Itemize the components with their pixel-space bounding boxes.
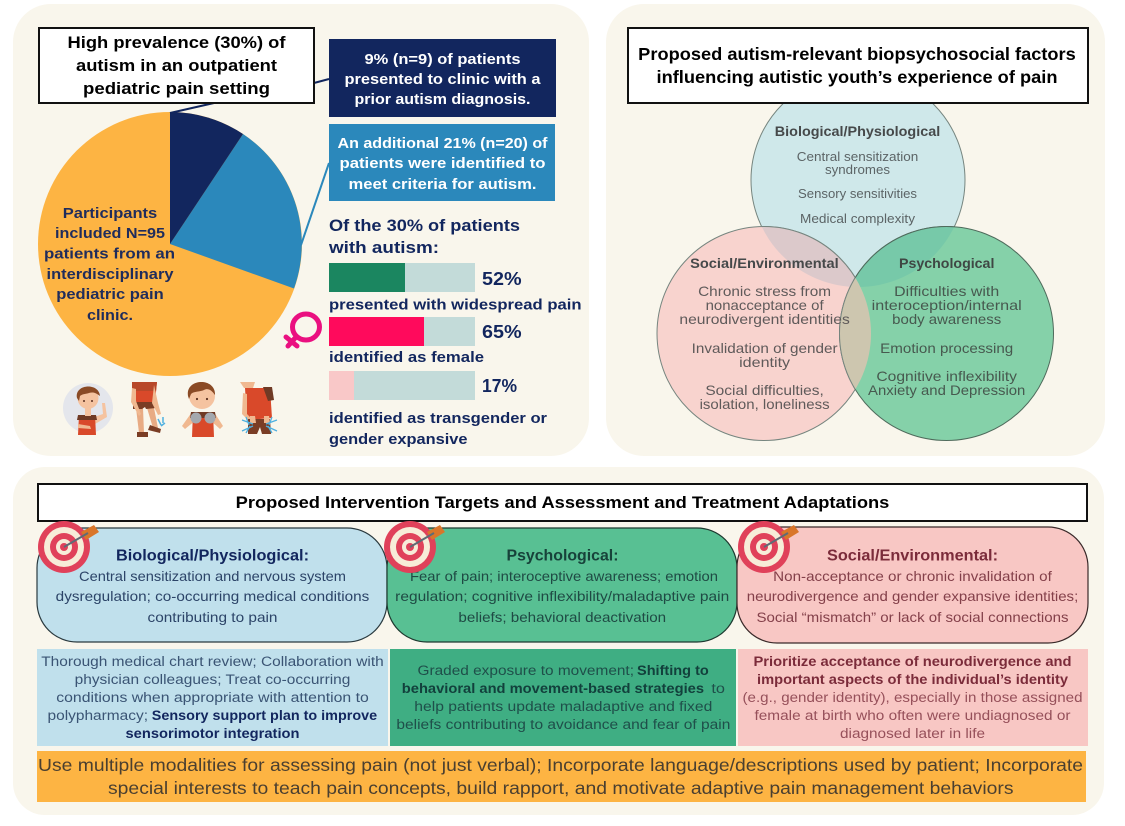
venn text: biological — [775, 123, 940, 226]
bar: transgender 17%: identified as transgender or — [329, 410, 547, 427]
icon: child with leg pain — [131, 382, 165, 437]
bar: transgender 17%: gender expansive — [329, 431, 468, 448]
adaptations: psychological — [390, 649, 736, 746]
pie chart — [38, 112, 302, 376]
adaptations: biological: conditions when appropriate with attention to — [56, 690, 369, 705]
target card: social: Social/Environmental: — [827, 548, 998, 565]
adaptations: social: important aspects of the individual’s identity — [757, 672, 1069, 687]
pie label — [44, 205, 175, 324]
callout: prior diagnosis: presented to clinic with a — [344, 71, 541, 88]
heading: high prevalence: pediatric pain setting — [83, 80, 270, 98]
heading: high prevalence — [39, 28, 314, 103]
heading: biopsychosocial factors — [628, 28, 1088, 103]
icon: target social — [738, 521, 799, 573]
venn text: biological: Central sensitization — [797, 150, 918, 164]
adaptations: social: Prioritize acceptance of neurodivergence and — [754, 654, 1072, 669]
heading: intervention targets — [38, 484, 1087, 521]
pie label: clinic. — [87, 307, 133, 324]
adaptations: social: diagnosed later in life — [840, 726, 985, 741]
adaptations: psychological: Graded exposure to movement; — [418, 663, 634, 678]
target card: psychological: regulation; cognitive inflexibility/maladaptive pain — [395, 588, 729, 604]
heading: biopsychosocial factors: influencing autistic youth’s experience of pain — [656, 67, 1058, 87]
venn text: psychological: Psychological — [899, 255, 994, 271]
venn text: social: isolation, loneliness — [700, 396, 830, 412]
bar: widespread pain 52%: presented with widespread pain — [329, 296, 582, 314]
venn text: social — [679, 255, 850, 412]
venn text: psychological: Cognitive inflexibility — [876, 368, 1017, 384]
venn text: social: Invalidation of gender — [692, 340, 838, 356]
target card: biological: Biological/Physiological: — [116, 548, 309, 565]
venn text: biological: Biological/Physiological — [775, 123, 940, 139]
bar: widespread pain 52% — [329, 263, 582, 314]
icon: child with shoulder pain — [182, 382, 223, 437]
banner: assessment modalities: special interests to teach pain concepts, build rapport, and motivate adaptive pain management behaviors — [108, 778, 1014, 798]
pie label: patients from an — [44, 246, 175, 262]
adaptations: biological: Thorough medical chart review; Collaboration with — [41, 654, 384, 669]
venn text: psychological: interoception/internal — [872, 297, 1022, 313]
callout: additional patients: An additional 21% (n=20) of — [338, 135, 549, 152]
venn text: psychological — [868, 255, 1025, 398]
venn text: psychological: body awareness — [892, 311, 1001, 327]
adaptations: biological — [37, 649, 388, 746]
venn text: biological: Sensory sensitivities — [798, 187, 917, 201]
subheading: of the 30 percent — [328, 217, 520, 257]
target card: social: Social “mismatch” or lack of social connections — [756, 609, 1068, 625]
target card: psychological: beliefs; behavioral deactivation — [458, 609, 666, 625]
adaptations: social: (e.g., gender identity), especially in those assigned — [742, 690, 1082, 705]
adaptations: psychological: to — [711, 681, 725, 696]
banner: assessment modalities: Use multiple modalities for assessing pain (not just verbal); Incorporate language/descriptions used by patient; Incorporate — [38, 755, 1083, 775]
venn text: social: nonacceptance of — [706, 297, 824, 313]
pie label: included N=95 — [55, 225, 165, 242]
callout: additional patients: meet criteria for autism. — [348, 176, 536, 193]
venn text: social: neurodivergent identities — [679, 311, 850, 327]
adaptations: psychological: Shifting to — [637, 663, 709, 678]
adaptations: psychological: behavioral and movement-based strategies — [402, 681, 704, 696]
bar: transgender 17%: 17% — [482, 375, 517, 396]
bar: widespread pain 52%: 52% — [482, 268, 522, 289]
callout: additional patients — [329, 124, 555, 201]
pie label: pediatric pain — [56, 286, 164, 303]
venn text: biological: Medical complexity — [800, 212, 916, 226]
panel: intervention targets — [13, 467, 1104, 815]
connector: navy slice to title and callout — [170, 79, 329, 113]
subheading: of the 30 percent: with autism: — [328, 239, 439, 257]
adaptations: biological: Sensory support plan to improve — [152, 708, 378, 723]
heading: high prevalence: High prevalence (30%) of — [68, 34, 286, 52]
heading: intervention targets: Proposed Intervention Targets and Assessment and Treatment Adaptations — [236, 494, 889, 512]
callout: additional patients: patients were identified to — [340, 155, 546, 172]
venn text: social: Social difficulties, — [705, 382, 824, 398]
target card: biological: Central sensitization and nervous system — [79, 568, 346, 584]
adaptations: psychological: beliefs contributing to avoidance and fear of pain — [396, 717, 730, 732]
adaptations: biological: sensorimotor integration — [126, 726, 300, 741]
target card: psychological: Psychological: — [506, 548, 618, 565]
venn text: social: Chronic stress from — [698, 283, 831, 299]
venn text: social: identity — [739, 354, 790, 370]
venn text: social: Social/Environmental — [690, 255, 839, 271]
pie label: Participants — [63, 205, 157, 222]
subheading: of the 30 percent: Of the 30% of patients — [329, 217, 520, 235]
icon: target psychological — [384, 521, 445, 573]
venn text: biological: syndromes — [825, 163, 890, 177]
target card: biological — [37, 528, 387, 642]
callout: prior diagnosis: prior autism diagnosis. — [354, 91, 530, 108]
panel: prevalence — [13, 4, 589, 456]
bar: female 65% — [329, 317, 522, 366]
banner: assessment modalities — [37, 751, 1086, 802]
icon: child with hip pain — [240, 382, 277, 434]
target card: social: neurodivergence and gender expansive identities; — [747, 588, 1078, 604]
pie label: interdisciplinary — [46, 266, 174, 283]
target card: biological: contributing to pain — [148, 609, 278, 625]
adaptations: psychological: help patients update maladaptive and fixed — [414, 699, 712, 714]
venn diagram — [657, 73, 1054, 440]
connector: blue slice to callout — [301, 163, 329, 245]
venn text: psychological: Difficulties with — [894, 283, 999, 299]
heading: high prevalence: autism in an outpatient — [76, 57, 278, 75]
bar: female 65%: identified as female — [329, 349, 484, 366]
bar: transgender 17% — [329, 371, 547, 448]
icon: target biological — [38, 521, 99, 573]
adaptations: biological: physician colleagues; Treat co-occurring — [75, 672, 350, 687]
callout: prior diagnosis: 9% (n=9) of patients — [364, 51, 520, 68]
target card: biological: dysregulation; co-occurring medical conditions — [56, 588, 369, 604]
icon: child with arm pain — [63, 383, 113, 435]
adaptations: social — [738, 649, 1088, 746]
venn text: psychological: Anxiety and Depression — [868, 382, 1025, 398]
heading: biopsychosocial factors: Proposed autism-relevant biopsychosocial factors — [638, 44, 1076, 64]
venn text: psychological: Emotion processing — [880, 340, 1013, 356]
target card: social — [737, 527, 1088, 643]
bar: female 65%: 65% — [482, 321, 522, 342]
adaptations: biological: polypharmacy; — [48, 708, 148, 723]
target card: psychological — [387, 528, 737, 642]
callout: prior diagnosis — [329, 39, 556, 117]
target card: social: Non-acceptance or chronic invalidation of — [773, 568, 1052, 584]
panel: biopsychosocial factors — [606, 4, 1105, 456]
icon: female symbol — [286, 314, 320, 346]
target card: psychological: Fear of pain; interoceptive awareness; emotion — [410, 568, 718, 584]
adaptations: social: female at birth who often were undiagnosed or — [754, 708, 1071, 723]
